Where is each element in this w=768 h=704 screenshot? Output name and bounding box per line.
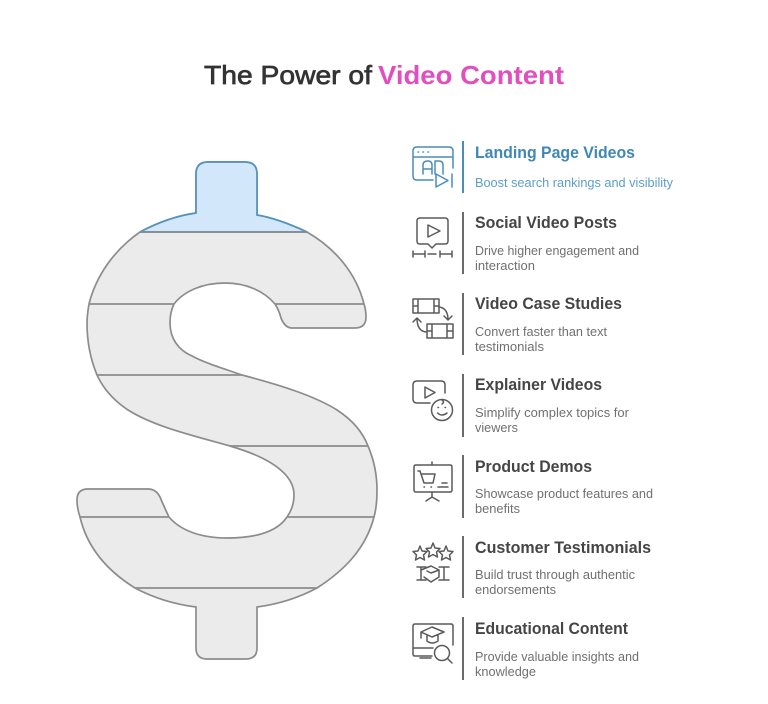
title: The Power of bbox=[204, 60, 373, 90]
dollar sign chart bbox=[77, 162, 377, 659]
icon: stars and handshake bbox=[413, 543, 453, 582]
highlighted top segment bbox=[140, 162, 307, 232]
description: benefits bbox=[475, 502, 520, 516]
divider bar bbox=[462, 141, 464, 193]
item: Product Demos bbox=[414, 455, 653, 518]
divider bar bbox=[462, 212, 464, 274]
divider bar bbox=[462, 293, 464, 355]
description: viewers bbox=[475, 421, 518, 435]
divider bar bbox=[462, 374, 464, 437]
item: Explainer Videos bbox=[413, 374, 629, 437]
icon: social video bbox=[413, 218, 452, 257]
icon: presentation board with cart bbox=[414, 462, 452, 501]
heading: Explainer Videos bbox=[475, 376, 602, 394]
description: Simplify complex topics for bbox=[475, 406, 629, 420]
description: knowledge bbox=[475, 665, 536, 679]
item: Social Video Posts bbox=[413, 212, 639, 274]
heading: Educational Content bbox=[475, 620, 628, 638]
icon: film strips with arrows bbox=[413, 299, 453, 338]
item: Customer Testimonials bbox=[413, 536, 651, 598]
heading: Social Video Posts bbox=[475, 214, 617, 232]
item: Video Case Studies bbox=[413, 293, 622, 355]
description: endorsements bbox=[475, 583, 556, 597]
icon: graduation cap and magnifier bbox=[413, 624, 453, 663]
dollar sign body bbox=[77, 162, 377, 659]
description: Provide valuable insights and bbox=[475, 650, 639, 664]
description: testimonials bbox=[475, 340, 544, 354]
segment dividers bbox=[80, 232, 374, 588]
icon: video and smiling face bbox=[413, 381, 452, 420]
description: Boost search rankings and visibility bbox=[475, 176, 674, 190]
icon: landing page window bbox=[413, 147, 453, 187]
heading: Landing Page Videos bbox=[475, 144, 635, 162]
title: Video Content bbox=[378, 60, 564, 90]
divider bar bbox=[462, 536, 464, 598]
heading: Product Demos bbox=[475, 458, 592, 476]
item: Landing Page Videos bbox=[413, 141, 674, 193]
description: Convert faster than text bbox=[475, 325, 608, 339]
description: Drive higher engagement and bbox=[475, 244, 639, 258]
divider bar bbox=[462, 617, 464, 680]
description: Showcase product features and bbox=[475, 487, 653, 501]
title bbox=[204, 60, 564, 90]
heading: Customer Testimonials bbox=[475, 539, 651, 557]
item: Educational Content bbox=[413, 617, 639, 680]
divider bar bbox=[462, 455, 464, 518]
heading: Video Case Studies bbox=[475, 295, 622, 313]
description: interaction bbox=[475, 259, 535, 273]
description: Build trust through authentic bbox=[475, 568, 635, 582]
